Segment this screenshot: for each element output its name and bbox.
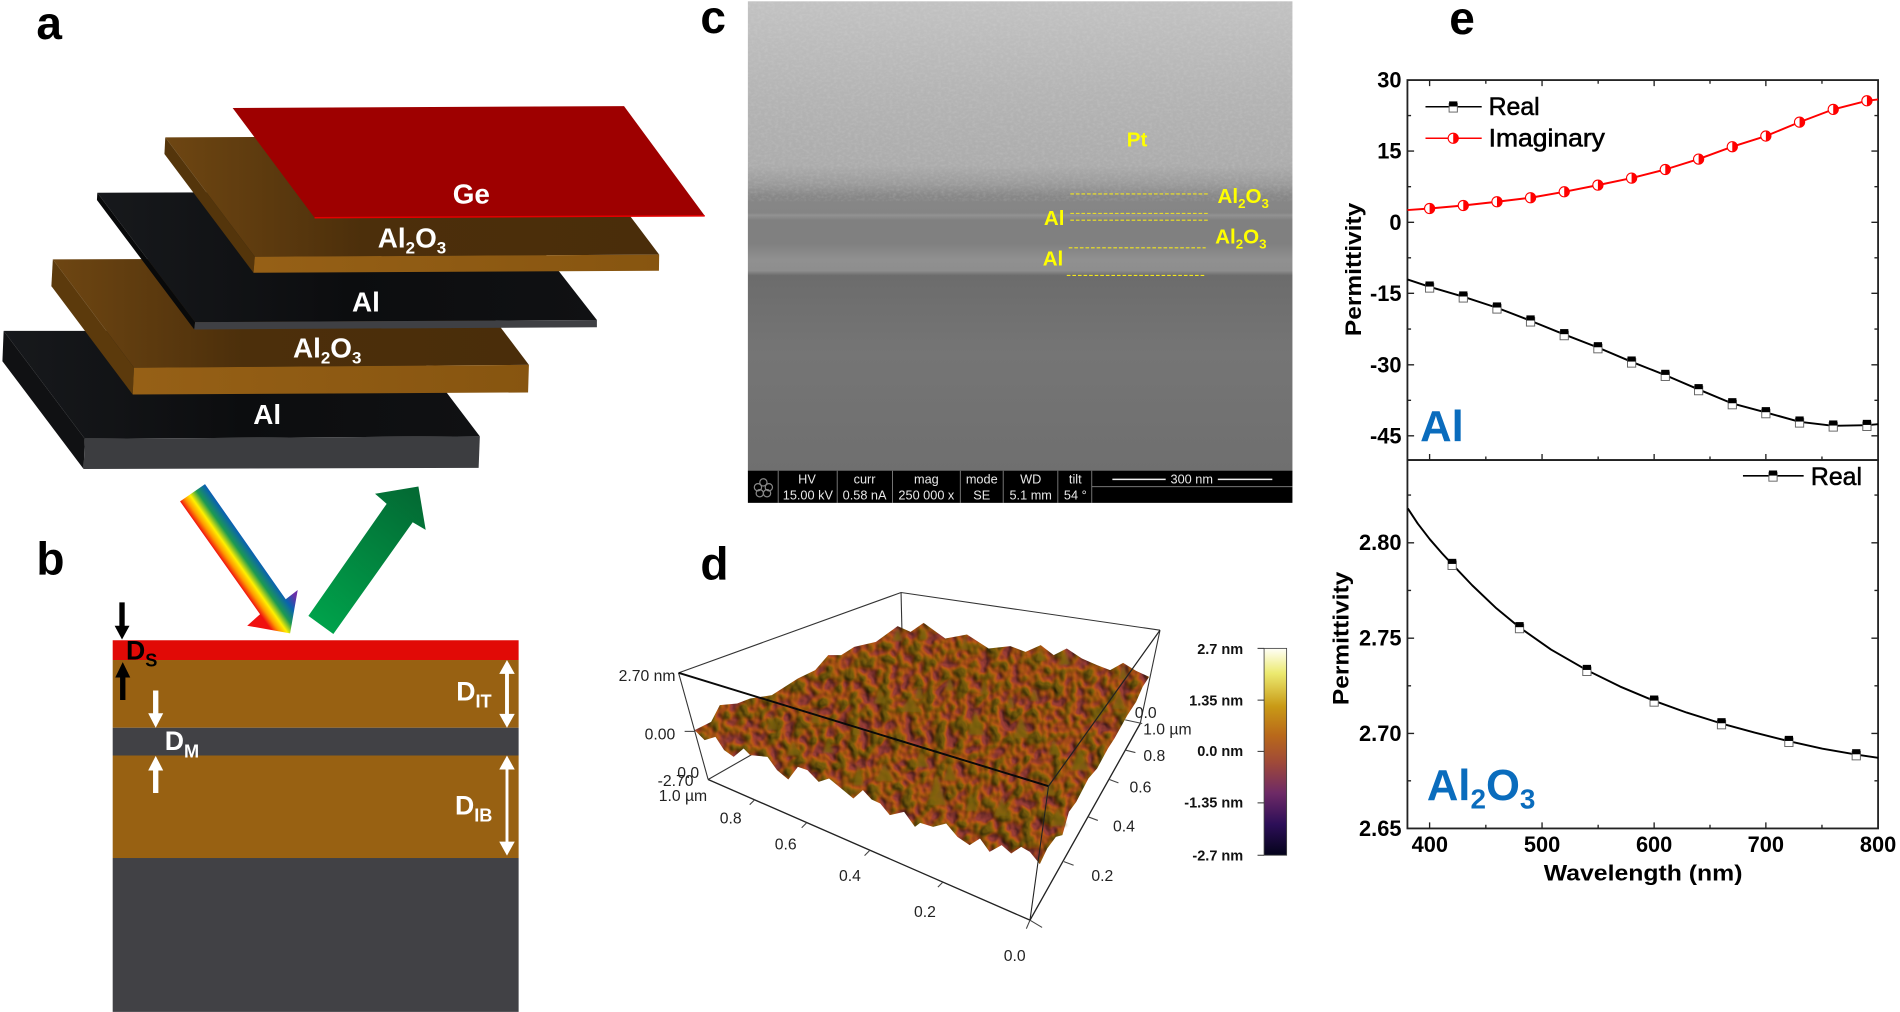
series: real (1408, 508, 1878, 760)
x tick labels: 800 (1860, 832, 1896, 857)
material label Al2O3: Al (1427, 762, 1470, 810)
y tick labels: 2.70 (1359, 721, 1401, 746)
SEM info bar: HV (798, 472, 816, 487)
label Al2O3 lower: 2 (1236, 237, 1243, 252)
y tick labels: 30 (1377, 67, 1401, 92)
y tick labels: 2.75 (1359, 626, 1401, 651)
y tick labels (1359, 530, 1401, 841)
SEM info bar: curr (854, 472, 876, 487)
material label Al2O3: 2 (1470, 784, 1486, 815)
colour bar: -1.35 nm (1184, 796, 1243, 812)
x tick labels: 500 (1524, 832, 1560, 857)
legend: Real (1489, 94, 1540, 121)
label lower Al: Al (253, 399, 281, 430)
layer: upper Al2O3 plate (164, 136, 659, 273)
SEM info bar: 5.1 mm (1009, 487, 1052, 502)
series: real (1407, 279, 1878, 431)
x tick labels: 400 (1412, 832, 1448, 857)
AFM axis labels: 0.4 (839, 868, 861, 885)
label lower Al2O3: 3 (352, 349, 361, 368)
panel d: AFM surface (619, 537, 1287, 965)
arrow: reflected green light (308, 486, 426, 634)
x tick labels: 600 (1636, 832, 1672, 857)
y tick labels: 15 (1377, 139, 1401, 164)
AFM axis labels: 2.70 nm (619, 668, 676, 685)
dashed layer boundaries (1067, 194, 1209, 275)
AFM surface (695, 623, 1149, 864)
arrows: Ds black (115, 602, 130, 700)
y tick labels: -15 (1370, 281, 1401, 306)
label Dm: M (184, 741, 199, 761)
y tick labels: 0 (1389, 210, 1401, 235)
AFM axis labels (619, 668, 1192, 965)
arrows: Dm white (148, 691, 163, 793)
SEM info bar (748, 471, 1292, 503)
layer: bottom Al plate (2, 331, 480, 469)
arrow: incident rainbow light (180, 484, 298, 633)
colour bar: 2.7 nm (1197, 642, 1243, 658)
label Al2O3 lower: O (1243, 226, 1259, 249)
label Ds: S (145, 651, 157, 671)
colour bar (1184, 642, 1287, 864)
double arrow Dit (499, 660, 515, 728)
x tick labels (1412, 832, 1896, 857)
AFM axis labels: 0.6 (1130, 780, 1152, 797)
3D box front lines (679, 630, 1160, 920)
label Al2O3 lower: 3 (1259, 237, 1267, 252)
layer: Ge plate (233, 106, 705, 218)
series: imaginary (1407, 96, 1878, 214)
label Dib: IB (474, 806, 492, 826)
layer: top insulator (113, 660, 519, 728)
SEM info bar: 300 nm (1171, 472, 1213, 487)
spikes: soft olive peaks (766, 624, 1128, 826)
AFM axis labels: 0.8 (1143, 748, 1165, 765)
label Pt: Pt (1127, 129, 1148, 152)
x axis title: Wavelength (nm) (1544, 860, 1742, 885)
AFM axis labels: 0.2 (1091, 868, 1113, 885)
icon: FEI logo (754, 479, 772, 497)
legend (1425, 94, 1606, 153)
SEM info bar: mag (914, 472, 939, 487)
label lower Al2O3: O (330, 333, 352, 364)
colour bar: -2.7 nm (1192, 848, 1243, 864)
chart: Al2O3 permittivity (1329, 460, 1896, 885)
AFM axis labels: 0.0 (1004, 948, 1026, 965)
label Al2O3 top: O (1246, 185, 1262, 208)
SEM info bar: 54 ° (1064, 487, 1087, 502)
label Ge: Ge (453, 179, 490, 210)
colour bar: 0.0 nm (1197, 744, 1243, 760)
label Dm: D (165, 726, 184, 756)
label Al2O3 top: 2 (1238, 196, 1246, 211)
label Dit: D (456, 676, 475, 706)
SEM image (748, 1, 1292, 471)
AFM axis labels: 0.6 (775, 837, 797, 854)
legend (1743, 464, 1862, 491)
material label Al: Al (1420, 403, 1464, 451)
y tick labels (1370, 67, 1401, 448)
AFM axis labels: 1.0 µm (659, 788, 707, 805)
SEM info bar: 250 000 x (898, 487, 955, 502)
3D box back lines (679, 593, 1160, 779)
AFM axis labels: 0.8 (720, 810, 742, 827)
SEM info bar: 15.00 kV (783, 487, 833, 502)
x tick labels: 700 (1748, 832, 1784, 857)
y tick labels: -30 (1370, 352, 1401, 377)
panel a: exploded layer stack (2, 0, 705, 469)
legend: Real (1811, 464, 1862, 491)
layer: lower Al2O3 plate (51, 258, 529, 395)
y axis title: Permittivity (1341, 203, 1366, 336)
double arrow Dib (499, 755, 515, 856)
y tick labels: 2.65 (1359, 816, 1401, 841)
label Al2O3 top: 3 (1262, 196, 1269, 211)
y axis title: Permittivity (1329, 572, 1354, 705)
chart: Al permittivity (1341, 67, 1878, 460)
AFM axis labels: 0.0 (1135, 705, 1157, 722)
y tick labels: 2.80 (1359, 530, 1401, 555)
AFM axis labels: 0.0 (677, 765, 699, 782)
SEM info bar: SE (973, 487, 990, 502)
SEM info bar: mode (966, 472, 998, 487)
label upper Al2O3: 2 (406, 238, 415, 257)
panel c: SEM cross section (700, 0, 1292, 503)
SEM info bar: tilt (1069, 472, 1082, 487)
legend: Imaginary (1489, 126, 1606, 153)
layer: Ge spacer (113, 640, 519, 660)
panel label b: b (36, 532, 64, 584)
label Al top: Al (1044, 207, 1065, 230)
label lower Al2O3: 2 (321, 349, 330, 368)
label Dit: IT (475, 692, 492, 712)
AFM axis labels: 0.00 (645, 726, 675, 743)
AFM axis labels: 0.2 (914, 904, 936, 921)
axis ticks (685, 720, 1142, 929)
layer: bottom insulator (113, 755, 519, 858)
panel e: permittivity charts (1329, 0, 1896, 885)
colour bar: 1.35 nm (1189, 693, 1243, 709)
SEM info bar: WD (1020, 472, 1041, 487)
label upper Al: Al (352, 287, 380, 318)
label lower Al2O3: Al (293, 333, 321, 364)
layer: metal (113, 728, 519, 755)
label upper Al2O3: Al (378, 222, 406, 253)
panel b: cross section (36, 532, 519, 1012)
y tick labels: -45 (1370, 423, 1401, 448)
label Al lower: Al (1043, 247, 1063, 270)
AFM axis labels: -2.70 (658, 773, 694, 790)
label Dib: D (455, 790, 474, 820)
material label Al2O3: O (1486, 762, 1520, 810)
layer: substrate (113, 858, 519, 1012)
label upper Al2O3: 3 (437, 238, 446, 257)
label Al2O3 top: Al (1218, 185, 1238, 208)
label upper Al2O3: O (415, 222, 437, 253)
material label Al2O3: 3 (1520, 784, 1535, 815)
AFM axis labels: 0.4 (1113, 818, 1135, 835)
panel label d: d (700, 537, 729, 589)
layer: upper Al plate (97, 192, 597, 329)
label Ds: D (126, 635, 145, 665)
label Al2O3 lower: Al (1215, 226, 1236, 249)
AFM axis labels: 1.0 µm (1143, 721, 1192, 738)
SEM info bar: 0.58 nA (843, 487, 887, 502)
